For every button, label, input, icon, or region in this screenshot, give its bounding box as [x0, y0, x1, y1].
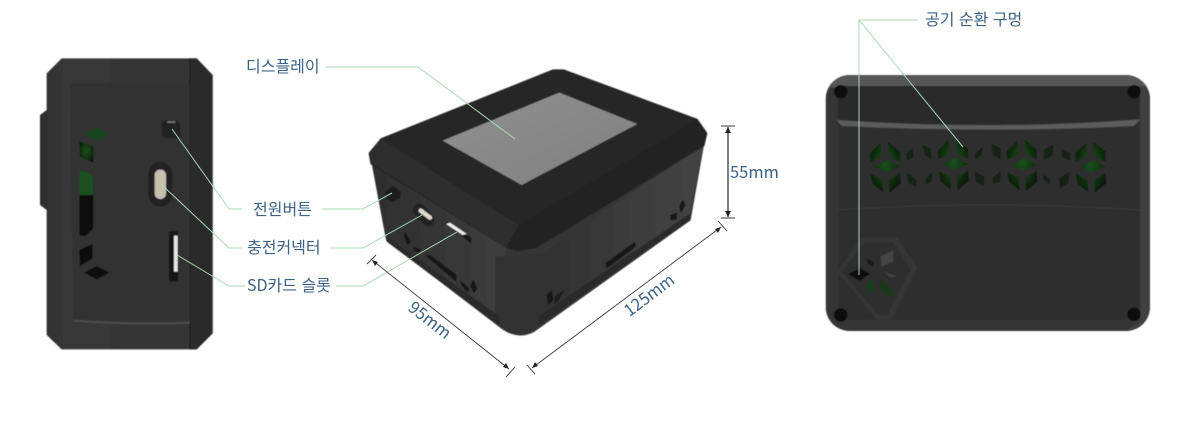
leader line: power button left — [172, 129, 242, 209]
dimension: height 55mm: 55mm — [730, 159, 779, 183]
left face — [372, 160, 507, 317]
back body — [826, 75, 1150, 331]
label: air holes: 공기 순환 구멍 — [925, 6, 1022, 30]
hexagon air vents — [870, 139, 1106, 193]
small air vents — [906, 144, 1070, 188]
dimension: width 125mm: 125mm — [618, 267, 679, 321]
display screen — [443, 93, 637, 185]
dimension: width 125mm — [527, 221, 727, 374]
dimension: height 55mm — [721, 126, 779, 218]
panel: side view of device — [40, 58, 213, 349]
leader line: charging connector left — [162, 185, 242, 248]
label: display: 디스플레이 — [246, 53, 320, 77]
panel: back view of device — [826, 75, 1150, 331]
right face — [542, 145, 703, 317]
label: power button: 전원버튼 — [253, 196, 312, 220]
leader line: SD slot left — [177, 255, 245, 286]
label: charging connector: 충전커넥터 — [247, 234, 321, 258]
side vents — [79, 127, 109, 279]
device side body — [40, 58, 213, 349]
lower body silhouette — [372, 145, 703, 335]
leader line: power button right — [322, 193, 392, 209]
ports and vents — [385, 186, 685, 305]
leader line: charging connector right — [330, 215, 422, 248]
SD card slot — [169, 231, 178, 281]
panel: 3D view of device — [370, 71, 706, 335]
leader line: air holes — [859, 20, 963, 275]
hexagon fan vent — [837, 237, 917, 319]
screw holes — [834, 85, 1141, 322]
dimension: depth 95mm: 95mm — [404, 295, 457, 344]
charging connector — [148, 162, 172, 207]
leader line: SD slot right — [336, 232, 457, 286]
power button — [162, 120, 180, 138]
dimension: depth 95mm — [367, 255, 515, 377]
leader line: display — [325, 67, 515, 139]
top cover — [370, 71, 706, 250]
label: SD card slot: SD카드 슬롯 — [247, 272, 331, 296]
